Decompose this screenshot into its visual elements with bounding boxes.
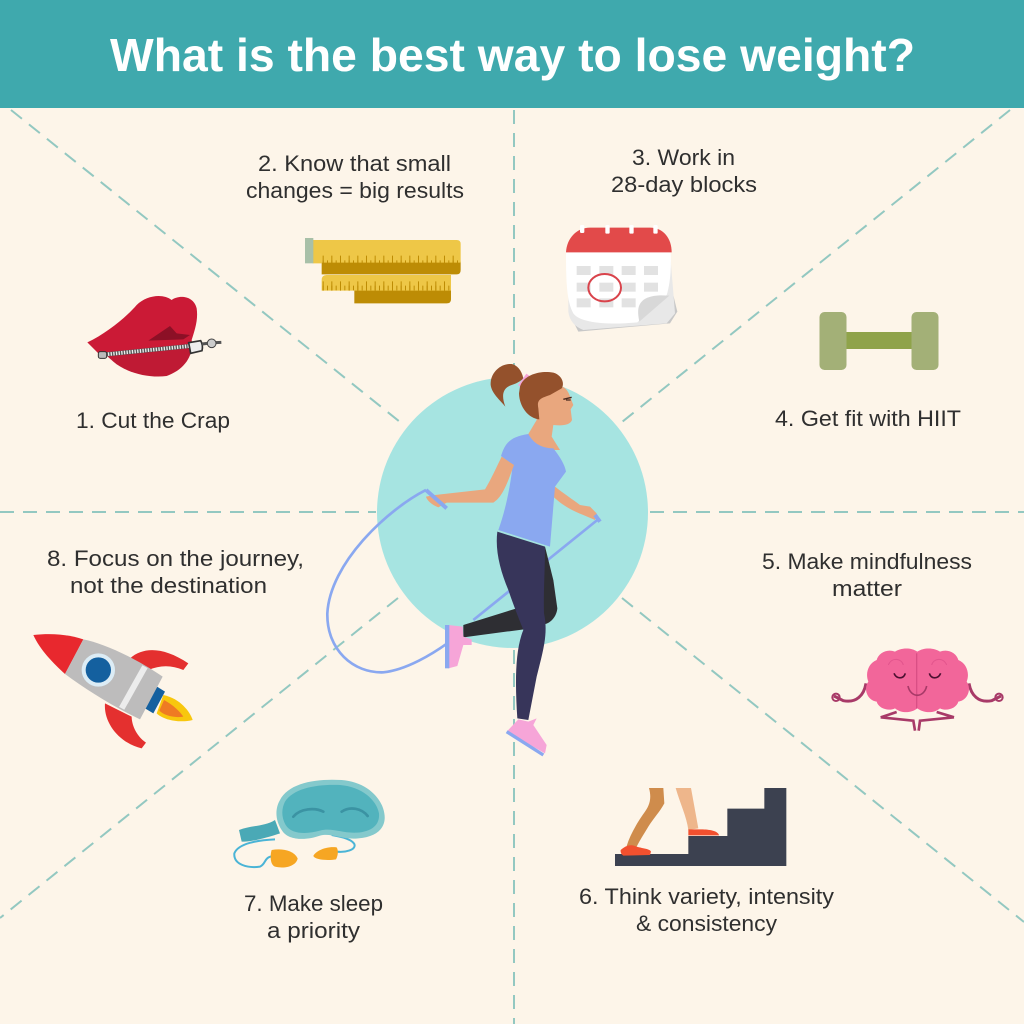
icon: measuring tape [305,238,461,303]
icon: stairs with feet [615,788,786,866]
label 2: small changes [246,151,464,203]
label 6: variety: & consistency [636,911,777,936]
central circle [377,377,648,648]
label 3: 28-day blocks: 28-day blocks [611,172,757,197]
label 5: mindfulness: matter [832,576,902,601]
icon: zipped lips [87,296,221,377]
label 2: small changes: changes = big results [246,178,464,203]
label 8: journey [47,546,304,598]
header banner with title [0,0,1024,108]
title: What is the best way to lose weight? [110,29,915,81]
icon: rocket [33,634,193,748]
label 7: sleep: 7. Make sleep [244,891,383,916]
label 3: 28-day blocks [611,145,757,197]
label 2: small changes: 2. Know that small [258,151,451,176]
icon: calendar [566,225,677,332]
icon: dumbbell [820,312,938,370]
label 6: variety [579,884,834,936]
figure: woman skipping rope [327,364,600,755]
label 1: Cut the Crap: 1. Cut the Crap [76,408,230,433]
label 7: sleep [244,891,383,943]
label 8: journey: not the destination [70,573,267,598]
label 5: mindfulness [762,549,972,601]
icon: sleep mask and earplugs [234,780,385,867]
icon: meditating brain [832,649,1003,731]
label 7: sleep: a priority [267,918,360,943]
label 3: 28-day blocks: 3. Work in [632,145,735,170]
label 8: journey: 8. Focus on the journey, [47,546,304,571]
label 5: mindfulness: 5. Make mindfulness [762,549,972,574]
label 4: HIIT: 4. Get fit with HIIT [775,406,961,431]
label 6: variety: 6. Think variety, intensity [579,884,834,909]
